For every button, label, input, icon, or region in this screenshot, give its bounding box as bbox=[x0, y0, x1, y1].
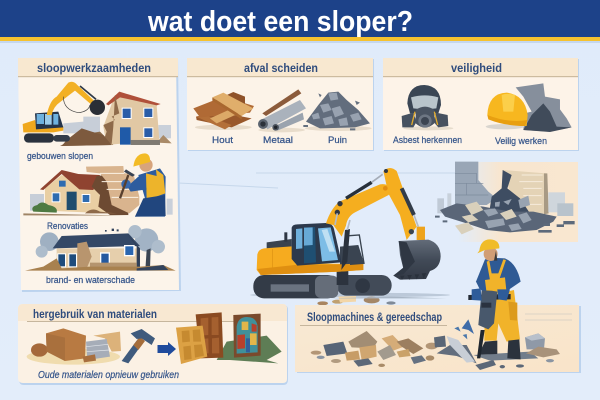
panel: afval scheiden bbox=[187, 58, 374, 151]
legs bbox=[484, 290, 520, 342]
label: brand- en waterschade: brand- en waterschade bbox=[46, 275, 135, 286]
illustration: old materials and hammer bbox=[27, 328, 155, 365]
label: gebouwen slopen: gebouwen slopen bbox=[27, 151, 93, 162]
body bbox=[267, 239, 292, 249]
heading: Sloopmachines & gereedschap: Sloopmachines & gereedschap bbox=[307, 312, 442, 324]
illustration: worker renovating house bbox=[23, 153, 173, 217]
cab bbox=[292, 223, 342, 266]
label: Asbest herkennen: Asbest herkennen bbox=[393, 135, 462, 146]
icon: gas mask bbox=[402, 85, 453, 130]
heading: veiligheid: veiligheid bbox=[451, 63, 502, 75]
icon: hard hat with rubble bbox=[486, 83, 572, 132]
icon: rubble pile bbox=[303, 92, 372, 131]
illustration: reused doors and stained glass bbox=[176, 312, 282, 364]
arrow: reuse bbox=[158, 342, 176, 356]
torso bbox=[476, 258, 521, 293]
panel: Sloopmachines & gereedschap bbox=[295, 305, 581, 373]
label: Metaal: Metaal bbox=[263, 135, 293, 146]
heading: sloopwerkzaamheden: sloopwerkzaamheden bbox=[37, 63, 151, 75]
main illustration: yellow excavator bbox=[250, 168, 450, 298]
icon: metal pipes bbox=[258, 89, 306, 132]
panel: collapsed wall bbox=[435, 162, 578, 242]
head bbox=[484, 247, 498, 261]
worker bbox=[135, 168, 166, 217]
panel: veiligheid bbox=[383, 58, 579, 151]
icon: wood planks bbox=[193, 92, 254, 130]
illustration: fire and water damaged house bbox=[25, 225, 176, 271]
gloves bbox=[472, 288, 482, 301]
bucket bbox=[393, 240, 441, 280]
label: Veilig werken: Veilig werken bbox=[495, 136, 547, 147]
tracks bbox=[337, 275, 392, 296]
heading: hergebruik van materialen: hergebruik van materialen bbox=[33, 307, 157, 321]
arm bbox=[326, 184, 391, 237]
heading: afval scheiden: afval scheiden bbox=[244, 63, 318, 75]
decorative lines bbox=[178, 173, 476, 188]
label: Oude materialen opnieuw gebruiken: Oude materialen opnieuw gebruiken bbox=[38, 370, 179, 381]
title: wat doet een sloper? bbox=[147, 6, 413, 38]
panel: sloopwerkzaamheden bbox=[18, 58, 181, 292]
jackhammer bbox=[468, 294, 511, 300]
label: Hout: Hout bbox=[212, 135, 233, 146]
label: Puin: Puin bbox=[328, 135, 347, 146]
excavator bbox=[24, 133, 54, 143]
header banner bbox=[0, 0, 600, 43]
rubble beneath excavator bbox=[317, 296, 447, 305]
panel: hergebruik van materialen bbox=[18, 304, 288, 385]
illustration: excavator demolishing house bbox=[23, 82, 172, 146]
illustration: worker with jackhammer bbox=[468, 239, 521, 359]
illustration: rubble and broken concrete bbox=[311, 319, 560, 370]
label: Renovaties: Renovaties bbox=[47, 221, 88, 232]
